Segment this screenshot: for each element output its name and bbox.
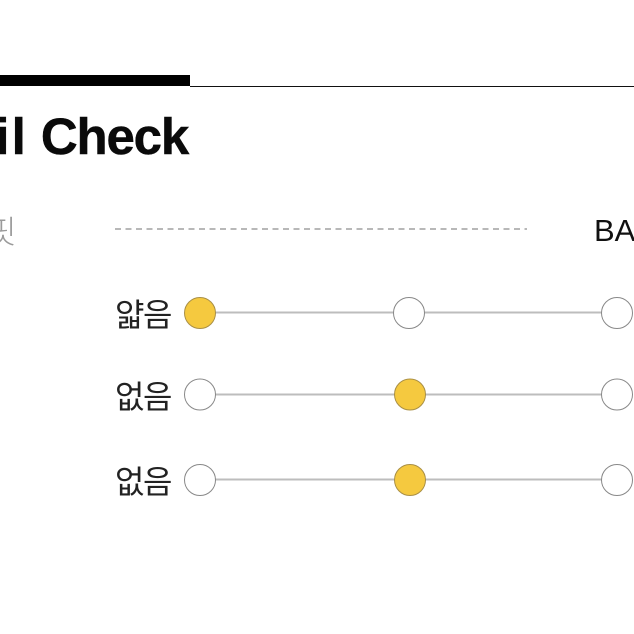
dashed divider [115, 228, 527, 230]
scale row 1 [184, 298, 632, 328]
header rule [0, 75, 634, 87]
label: 얇음: 얇음 [115, 297, 171, 333]
scale row 3 [184, 464, 632, 496]
scale row 2 [184, 379, 632, 410]
label: 없음: 없음 [115, 379, 171, 415]
label: 없음: 없음 [115, 464, 171, 500]
